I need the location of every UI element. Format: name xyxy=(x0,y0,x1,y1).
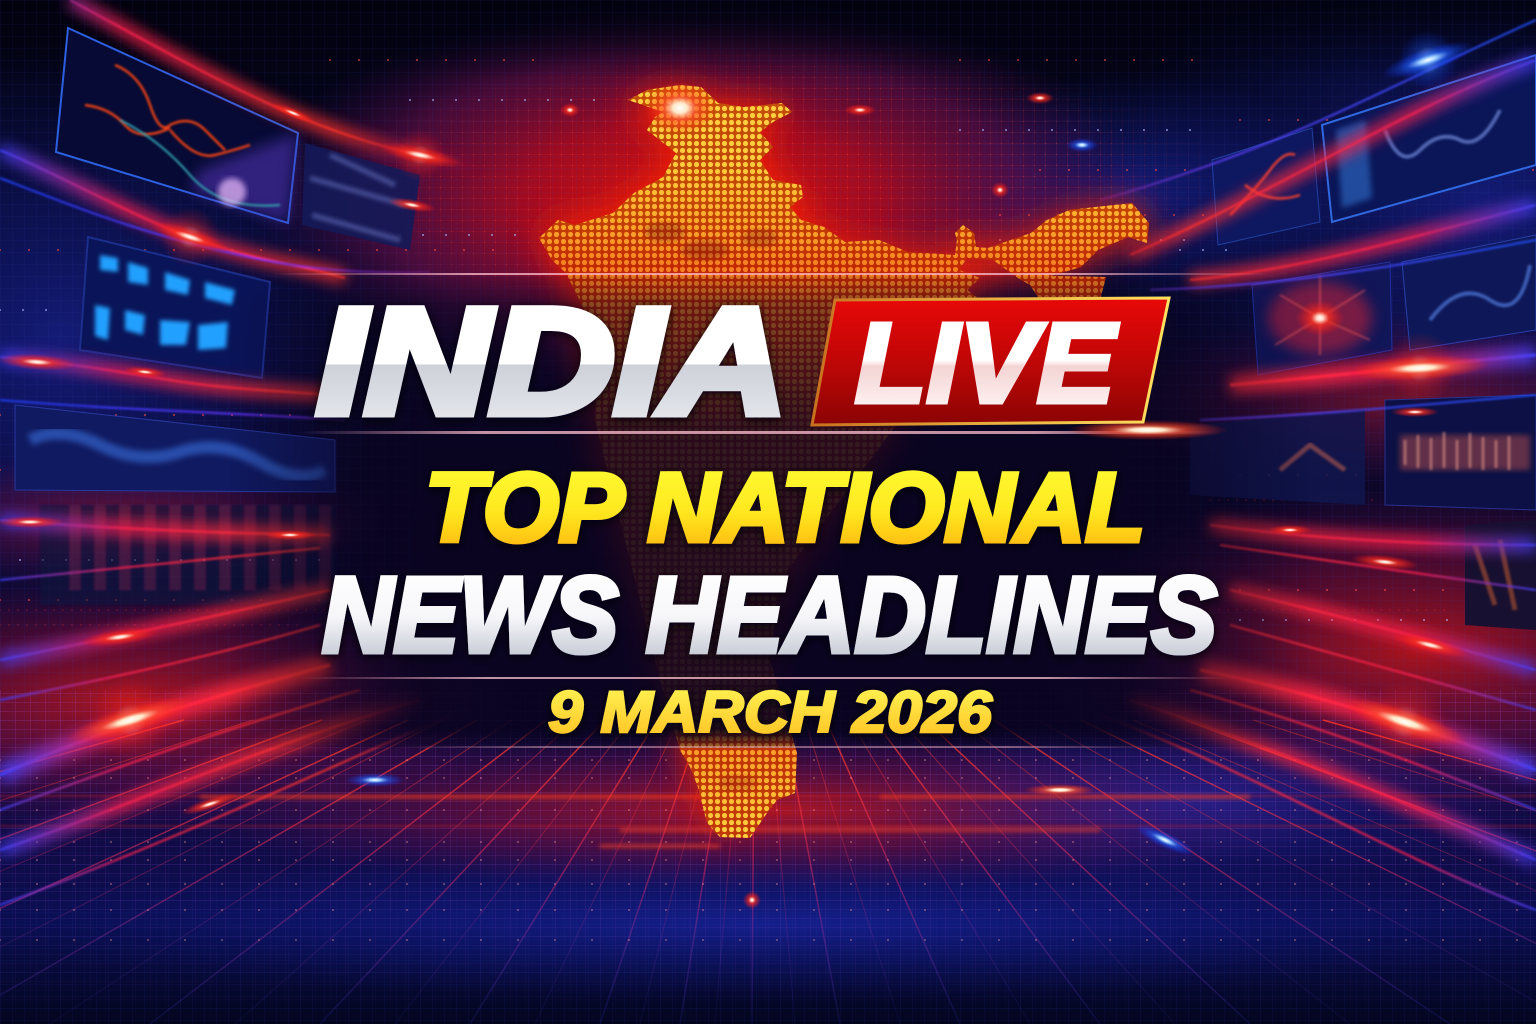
screen: dim bars xyxy=(40,505,335,605)
headline: NEWS HEADLINES: NEWS HEADLINES xyxy=(322,554,1217,675)
badge: LIVE xyxy=(812,298,1228,440)
India map xyxy=(539,82,1149,840)
screen: blue data panel xyxy=(80,237,270,378)
screen: top right small xyxy=(1212,128,1320,245)
dark band behind headlines xyxy=(230,276,1310,748)
headline: TOP NATIONAL: TOP NATIONAL xyxy=(425,453,1145,562)
screen: top right large xyxy=(1322,55,1536,222)
screen: world data xyxy=(302,143,420,250)
floor grid xyxy=(0,690,1536,1024)
headline: INDIA: INDIA xyxy=(317,277,787,445)
screen: blue mountains chart xyxy=(15,405,335,492)
date: 9 MARCH 2026 xyxy=(548,680,993,745)
screen: mid right xyxy=(1402,235,1536,350)
divider lines xyxy=(270,273,1270,748)
screen: red starburst xyxy=(1252,262,1392,375)
data dots scattered on side walls xyxy=(0,60,1536,625)
screen: orange map chart xyxy=(56,28,298,223)
map spark xyxy=(644,82,716,134)
screen: edge panel xyxy=(1465,520,1536,630)
badge label: LIVE xyxy=(855,300,1119,426)
map glow xyxy=(539,85,1149,840)
screen: waveform xyxy=(1385,395,1536,510)
panel: left video wall screens xyxy=(15,28,420,605)
panel: right video wall screens xyxy=(1190,55,1536,630)
map shape xyxy=(539,85,1149,838)
screen: dim chart xyxy=(1190,410,1365,505)
